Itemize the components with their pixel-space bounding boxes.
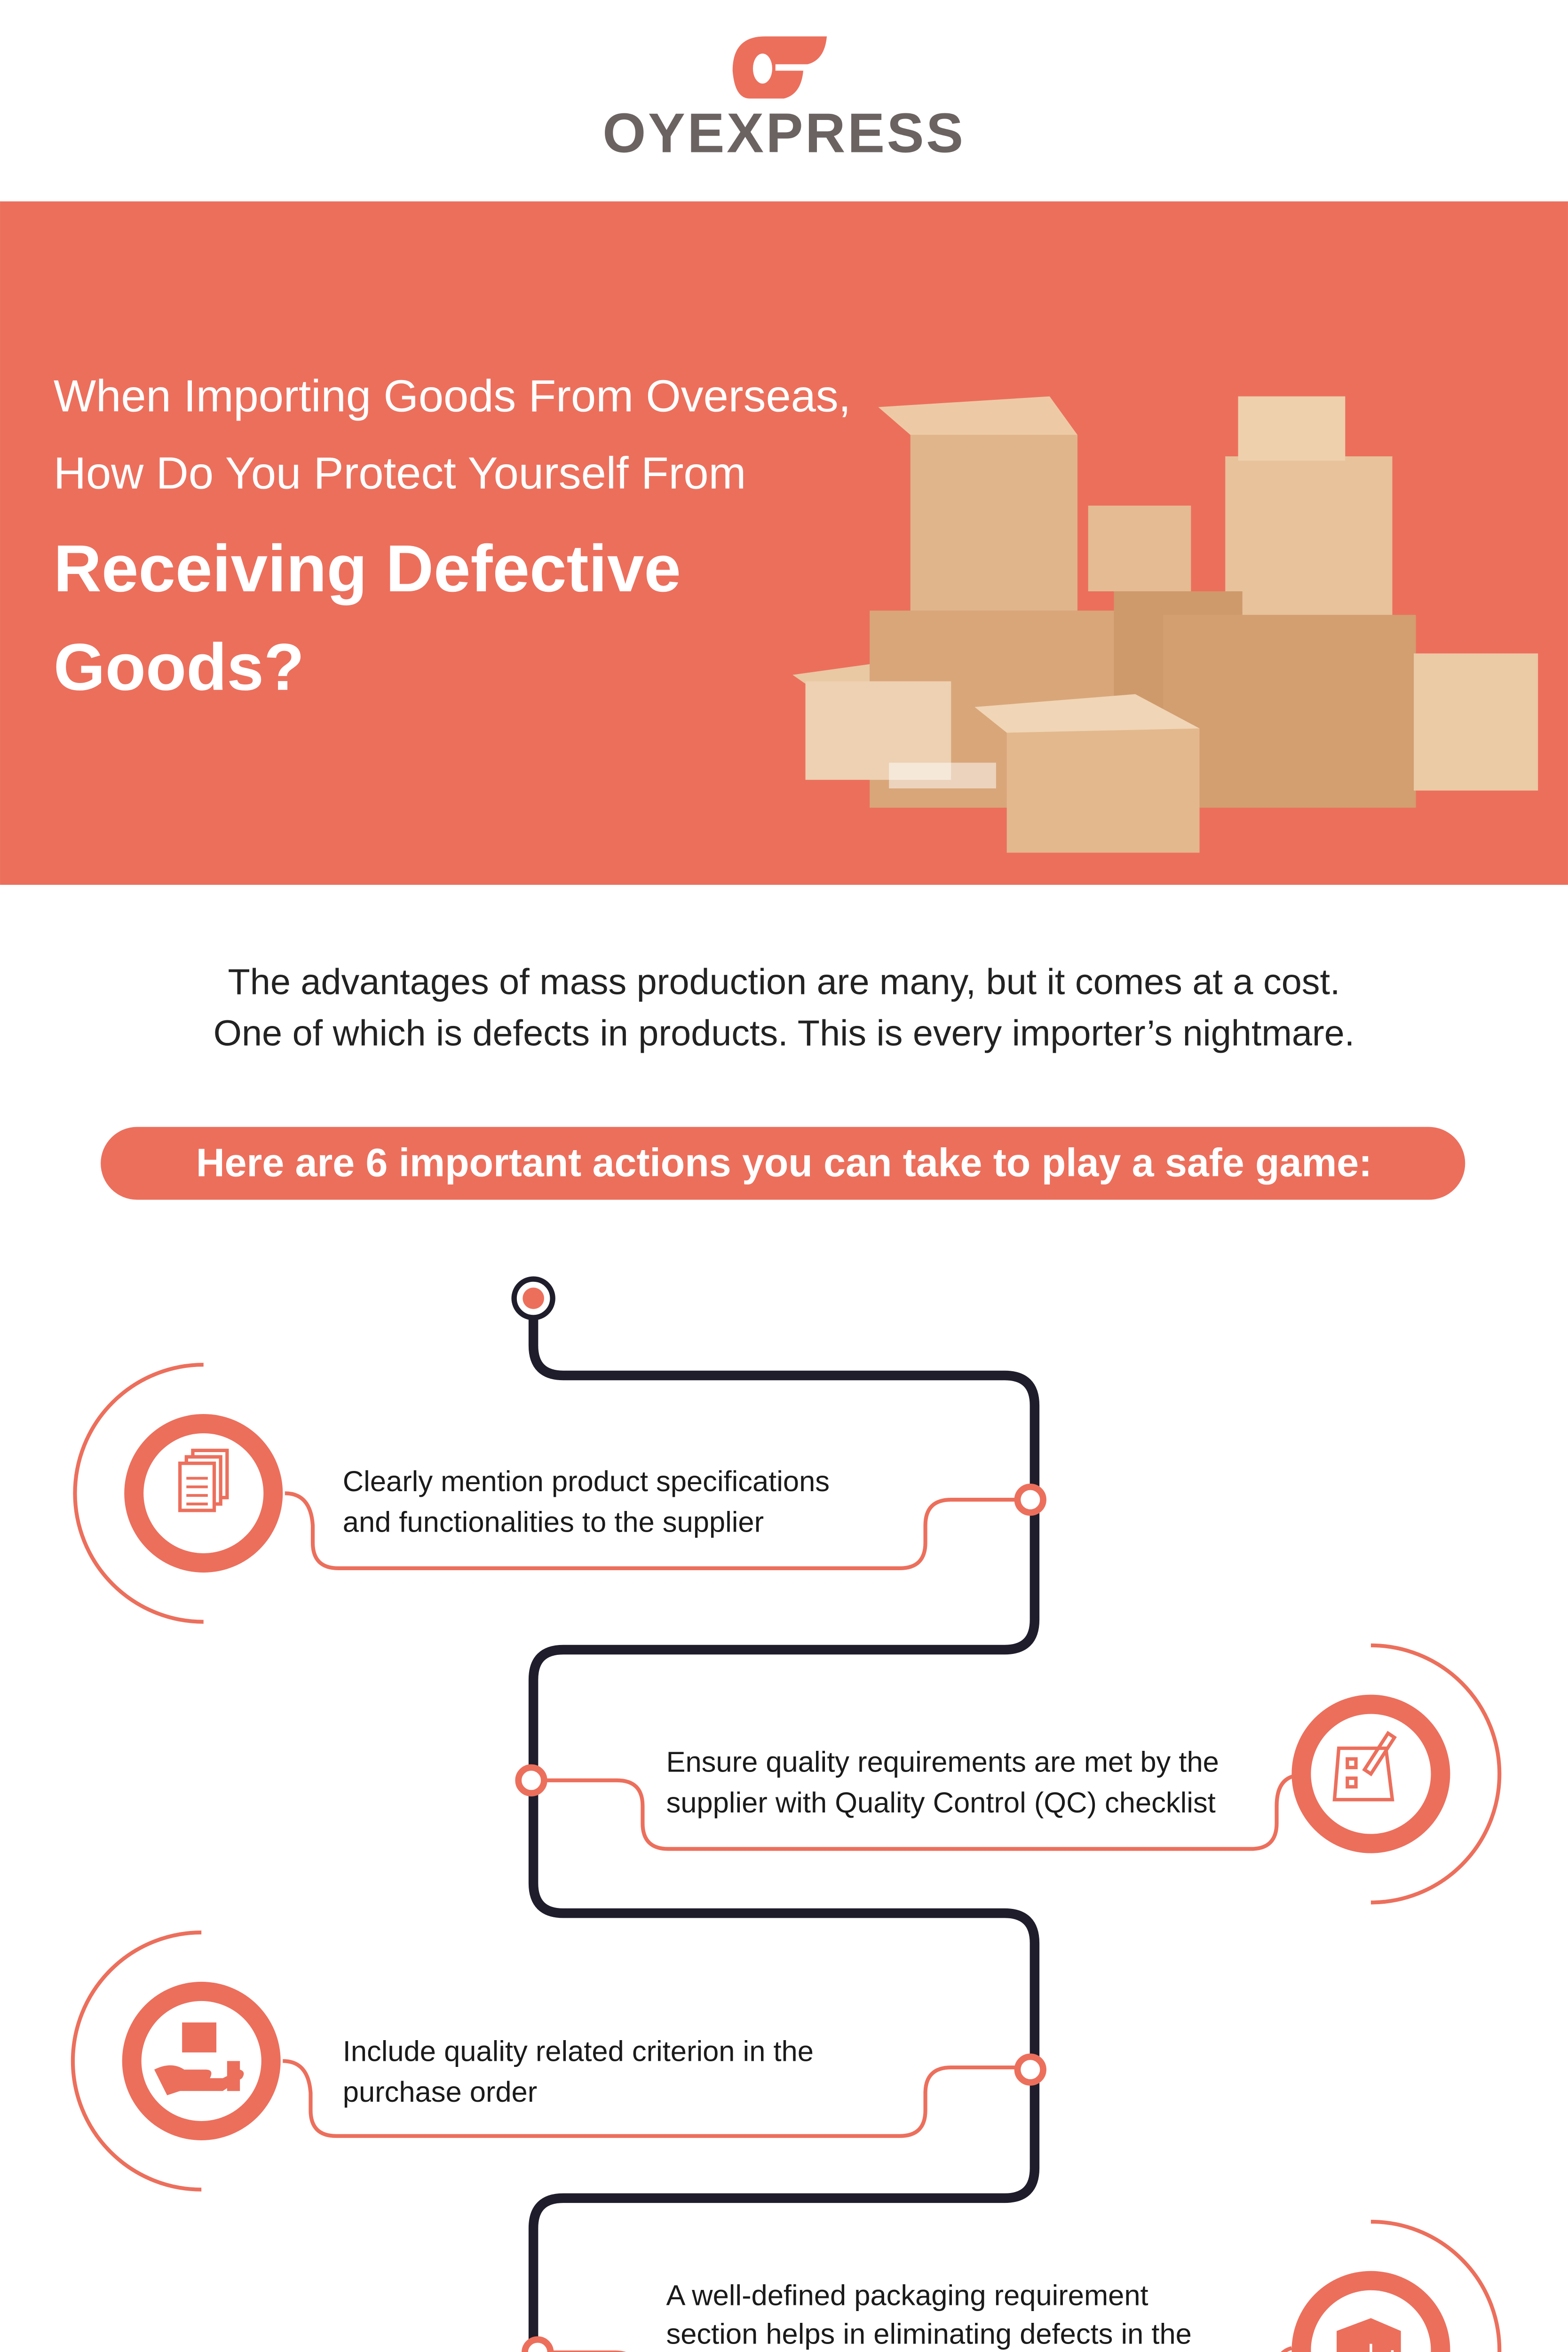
step 1: and functionalities to the supplier [343, 1506, 764, 1538]
pill heading: Here are 6 important actions you can take to play a safe game: [196, 1140, 1372, 1184]
step 4 [525, 2222, 1499, 2352]
title: How Do You Protect Yourself From [54, 448, 746, 498]
step 2 [518, 1645, 1499, 1902]
icon: documents [180, 1450, 227, 1510]
intro text [214, 961, 1354, 1054]
icon: hand with box [154, 2022, 244, 2095]
logo: OYEXPRESS [602, 102, 966, 164]
step 3: Include quality related criterion in the [343, 2035, 814, 2067]
logo [602, 36, 966, 164]
pill heading [101, 1127, 1465, 1200]
title [54, 371, 851, 704]
intro text: The advantages of mass production are many, but it comes at a cost. [228, 961, 1340, 1002]
hero banner [0, 201, 1568, 885]
timeline path [514, 1279, 1045, 2352]
icon: checklist pen [1335, 1733, 1394, 1800]
step 2: Ensure quality requirements are met by the [666, 1746, 1219, 1779]
intro text: One of which is defects in products. This is every importer’s nightmare. [214, 1013, 1354, 1054]
icon: package [1337, 2318, 1401, 2352]
title: Goods? [54, 630, 304, 704]
illustration: cardboard boxes [792, 397, 1538, 853]
step 2: supplier with Quality Control (QC) checklist [666, 1787, 1216, 1819]
step 1: Clearly mention product specifications [343, 1465, 830, 1498]
title: When Importing Goods From Overseas, [54, 371, 851, 421]
step 3 [73, 1932, 1043, 2190]
step 4: section helps in eliminating defects in the [666, 2318, 1192, 2351]
title: Receiving Defective [54, 531, 681, 605]
step 1 [75, 1365, 1043, 1622]
step 4: A well-defined packaging requirement [666, 2280, 1148, 2312]
step 3: purchase order [343, 2076, 537, 2108]
